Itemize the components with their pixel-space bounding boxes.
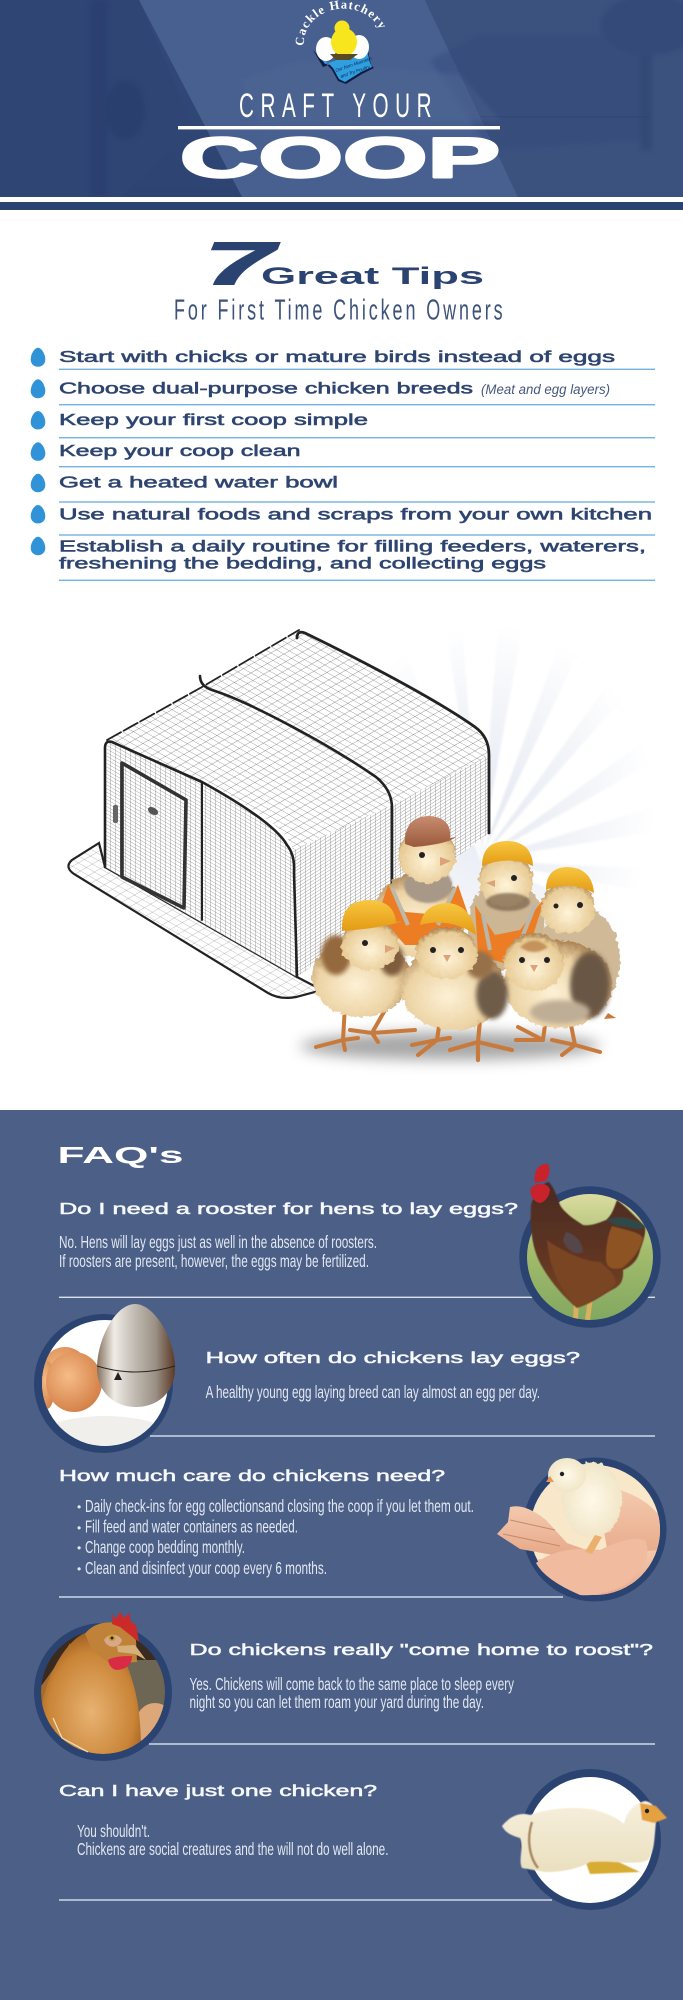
coop front wall (105, 740, 297, 977)
title: coop: COOP (180, 126, 500, 190)
FAQ 5: sitting chicken: Chickens are social creatures and the will not do well alone. (77, 1839, 388, 1859)
ground shadow (300, 1032, 600, 1060)
sunburst behind coop (325, 620, 665, 995)
FAQ 3: chick in hands: How much care do chickens need? (59, 1468, 446, 1485)
tip 7: freshening the bedding, and collecting eggs (59, 555, 546, 572)
illustration: wire coop (68, 630, 489, 998)
photo: hen in circle (34, 1612, 175, 1761)
title: craft your: CRAFT YOUR (239, 87, 432, 125)
title rule (178, 126, 500, 129)
heading: 7 great tips (204, 230, 484, 297)
FAQ 1: rooster: If roosters are present, however, the eggs may be fertilized. (59, 1251, 369, 1271)
coop roof back section (202, 630, 489, 805)
logo: Cackle Hatchery (296, 0, 385, 84)
tip 1 (31, 348, 655, 370)
bullet list: Daily check-ins for egg collectionsand closing the coop if you let them out. (85, 1496, 474, 1516)
bullet list: Fill feed and water containers as needed. (85, 1517, 298, 1537)
bullet list: • (77, 1521, 81, 1535)
tip 6: Use natural foods and scraps from your own kitchen (59, 506, 652, 523)
tip 7: Establish a daily routine for filling feeders, waterers, (59, 539, 646, 556)
heading: 7 great tips: Great Tips (261, 263, 484, 290)
header banner (0, 0, 683, 210)
tip 3: Keep your first coop simple (59, 412, 368, 429)
FAQ 2: egg timer: How often do chickens lay eggs? (206, 1350, 581, 1367)
photo: chick in hands in circle (497, 1458, 666, 1602)
illustration: chicks in hard hats (300, 816, 620, 1060)
bullet list: Clean and disinfect your coop every 6 months. (85, 1558, 327, 1578)
coop base (68, 843, 322, 998)
coop right wall (293, 755, 489, 977)
FAQ 1: rooster (59, 1164, 661, 1328)
tip 4: Keep your coop clean (59, 443, 300, 460)
FAQ 4: hen: night so you can let them roam your yard during the day. (190, 1692, 484, 1712)
tip 6 (31, 505, 655, 536)
tips list (31, 348, 655, 581)
bullet list: • (77, 1562, 81, 1576)
FAQ 1: rooster: Do I need a rooster for hens to lay eggs? (59, 1201, 519, 1218)
tip 2: (Meat and egg layers) (481, 382, 610, 397)
coop door (113, 763, 186, 908)
coop roof front section (107, 687, 392, 850)
tip 2 (31, 379, 655, 405)
photo: rooster in circle (519, 1164, 661, 1328)
photo: eggs and timer in circle (34, 1304, 175, 1464)
FAQ 5: sitting chicken: Can I have just one chicken? (59, 1783, 378, 1800)
chick: brown hat with vest (374, 816, 470, 957)
tip 3 (31, 411, 655, 438)
heading: 7 great tips: 7 (204, 230, 280, 297)
tip 7 (31, 537, 655, 581)
FAQ 4: hen: Do chickens really "come home to roost"? (190, 1642, 654, 1659)
panel: FAQ background (0, 1110, 683, 2000)
tip 4 (31, 442, 655, 467)
FAQ heading: FAQ's (58, 1142, 184, 1168)
FAQ 4: hen (34, 1612, 655, 1761)
bullet list (77, 1496, 474, 1578)
FAQ 2: egg timer (34, 1304, 655, 1464)
tip 1: Start with chicks or mature birds instead of eggs (59, 349, 615, 366)
FAQ 4: hen: Yes. Chickens will come back to the same place to sleep every (190, 1674, 514, 1694)
chick: yellow hat with vest (468, 841, 545, 971)
subheading: For First Time Chicken Owners (174, 294, 503, 327)
chick: back right (536, 867, 620, 1019)
chick: front left (312, 900, 415, 1050)
bullet list: • (77, 1541, 81, 1555)
chick: front right, no hat (504, 933, 612, 1055)
FAQ 3: chick in hands (59, 1458, 666, 1602)
FAQ 5: sitting chicken (59, 1769, 667, 1910)
bullet list: Change coop bedding monthly. (85, 1537, 245, 1557)
chick: front centre (401, 903, 512, 1060)
tip 5: Get a heated water bowl (59, 475, 338, 492)
coop frame (105, 630, 489, 977)
bullet list: • (77, 1500, 81, 1514)
logo: Cackle Hatchery: and Try Poultry (340, 64, 371, 79)
FAQ 5: sitting chicken: You shouldn't. (77, 1821, 150, 1841)
photo: chicken in circle (502, 1769, 667, 1910)
tip 2: Choose dual-purpose chicken breeds (59, 380, 473, 397)
tip 5 (31, 474, 655, 503)
FAQ 1: rooster: No. Hens will lay eggs just as well in the absence of roosters. (59, 1232, 377, 1252)
logo: Cackle Hatchery: Our farm Mountain (335, 56, 373, 73)
